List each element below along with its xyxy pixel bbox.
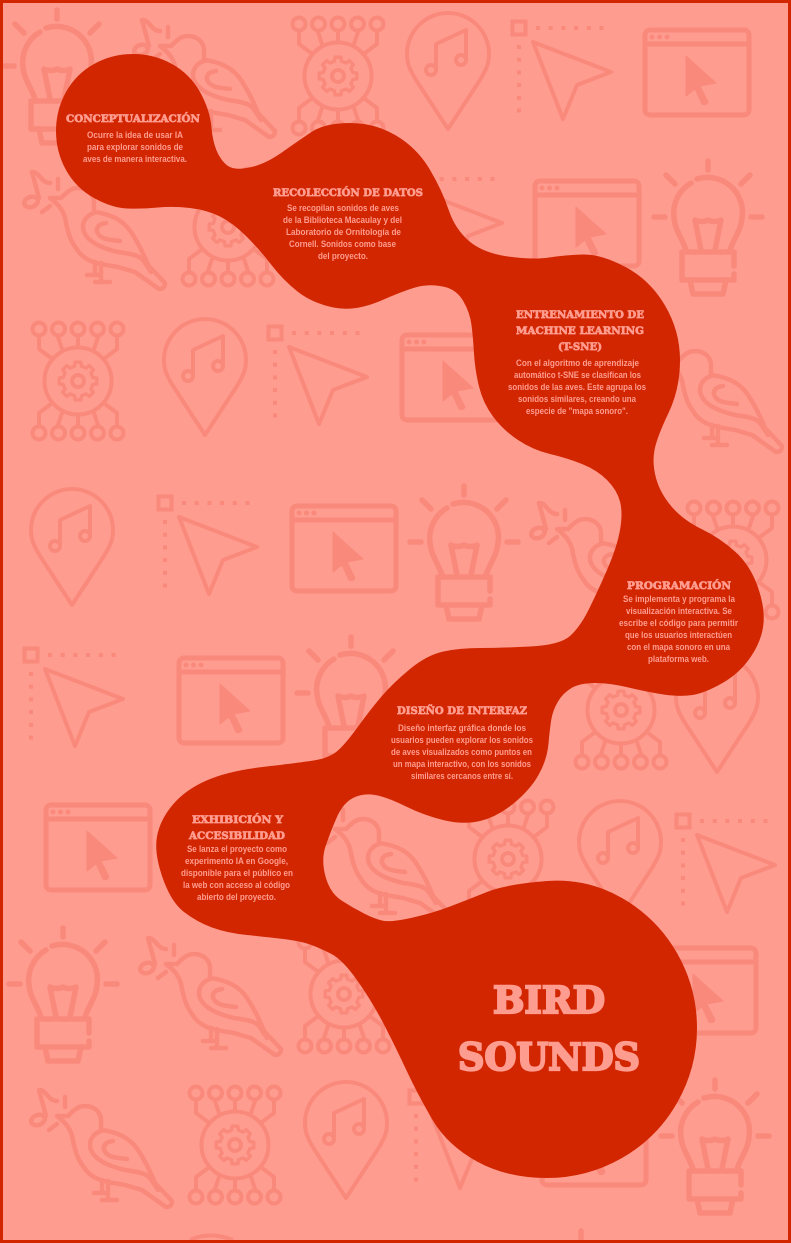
description: Se recopilan sonidos de aves — [287, 203, 399, 213]
icon: circuit gear — [688, 502, 778, 618]
step 5: diseño de interfaz — [391, 703, 533, 781]
icon: music map pin — [676, 656, 758, 772]
icon: circuit gear — [462, 800, 554, 918]
description: la web con acceso al código — [183, 880, 290, 890]
icon: light bulb — [410, 486, 518, 619]
icon: music map pin — [164, 319, 246, 435]
title: SOUNDS — [458, 1035, 640, 1079]
step 1: conceptualización — [66, 111, 200, 164]
icon: singing bird — [23, 172, 165, 289]
heading — [188, 812, 285, 842]
icon: browser window — [542, 1100, 646, 1185]
icon: singing bird — [640, 335, 782, 452]
heading: DISEÑO DE INTERFAZ — [397, 703, 527, 717]
description — [83, 130, 187, 164]
description: un mapa interactivo, con los sonidos — [393, 759, 531, 769]
heading: MACHINE LEARNING — [516, 325, 644, 337]
step 2: recolección de datos — [273, 185, 423, 261]
description: Diseño interfaz gráfica donde los — [398, 723, 526, 733]
description: de aves visualizados como puntos en — [391, 747, 532, 757]
description: sonidos similares, creando una — [518, 394, 637, 404]
heading: (T-SNE) — [558, 341, 602, 353]
heading — [516, 309, 644, 353]
heading: PROGRAMACIÓN — [627, 578, 731, 592]
icon: browser window — [46, 805, 150, 890]
icon: light bulb — [661, 1080, 769, 1213]
icon: pointer with guides — [404, 172, 502, 270]
heading: CONCEPTUALIZACIÓN — [66, 111, 200, 125]
description: automático t-SNE se clasifican los — [514, 370, 641, 380]
description: plataforma web. — [648, 654, 709, 664]
description: Se lanza el proyecto como — [187, 844, 287, 854]
icon: light bulb — [9, 928, 117, 1061]
icon: light bulb — [297, 637, 405, 770]
icon: browser window — [645, 30, 749, 115]
icon: singing bird — [133, 20, 275, 137]
icon: pointer with guides — [158, 496, 257, 594]
description: escribe el código para permitir — [619, 618, 738, 628]
icon: circuit gear — [32, 322, 124, 440]
description: Cornell. Sonidos como base — [289, 239, 396, 249]
heading: ENTRENAMIENTO DE — [516, 309, 644, 321]
icon: browser window — [292, 506, 396, 591]
description: especie de "mapa sonoro". — [526, 406, 628, 416]
description — [619, 594, 738, 664]
icon: music map pin — [31, 489, 113, 605]
icon: light bulb — [3, 10, 111, 143]
description: sonidos de las aves. Este agrupa los — [508, 382, 646, 392]
icon: pointer with guides — [410, 1090, 508, 1188]
description: usuarios pueden explorar los sonidos — [391, 735, 533, 745]
title — [458, 978, 640, 1079]
heading: RECOLECCIÓN DE DATOS — [273, 185, 423, 199]
description — [283, 203, 402, 261]
description: visualización interactiva. Se — [626, 606, 732, 616]
description: que los usuarios interactúen — [625, 630, 732, 640]
icon: circuit gear — [298, 936, 390, 1052]
description — [508, 358, 646, 416]
description — [181, 844, 293, 902]
icon: circuit gear — [190, 1086, 280, 1204]
icon: singing bird — [139, 938, 281, 1055]
description: disponible para el público en — [181, 868, 293, 878]
icon: singing bird — [30, 1090, 172, 1207]
icon: singing bird — [308, 803, 450, 920]
description — [391, 723, 533, 781]
heading: ACCESIBILIDAD — [188, 830, 285, 842]
step 4: programación — [619, 578, 738, 664]
icon: browser window — [535, 181, 639, 266]
description: abierto del proyecto. — [197, 892, 276, 902]
description: aves de manera interactiva. — [83, 154, 187, 164]
icon: browser window — [652, 948, 756, 1033]
icon: browser window — [179, 658, 283, 743]
title: BIRD — [493, 978, 605, 1022]
icon: pointer with guides — [24, 648, 123, 746]
description: Laboratorio de Ornitología de — [286, 227, 401, 237]
icon: music map pin — [579, 801, 661, 917]
description: experimento IA en Google, — [185, 856, 288, 866]
icon: browser window — [402, 335, 506, 420]
description: de la Biblioteca Macaulay y del — [283, 215, 402, 225]
description: Se implementa y programa la — [623, 594, 736, 604]
description: para explorar sonidos de — [87, 142, 183, 152]
step 6: exhibición y accesibilidad — [181, 812, 293, 902]
icon: circuit gear — [182, 168, 274, 286]
icon: circuit gear — [576, 652, 666, 768]
icon: singing bird — [530, 503, 672, 620]
step 3: entrenamiento de machine learning — [508, 309, 646, 416]
icon: music map pin — [407, 13, 489, 129]
description: similares cercanos entre sí. — [411, 771, 513, 781]
icon: circuit gear — [292, 18, 384, 134]
description: Ocurre la idea de usar IA — [87, 130, 183, 140]
description: del proyecto. — [318, 251, 368, 261]
icon: pointer with guides — [268, 326, 367, 424]
icon: pointer with guides — [676, 814, 775, 912]
description: con el mapa sonoro en una — [627, 642, 731, 652]
icon: light bulb top ray at the bottom edge — [578, 1231, 584, 1240]
icon: light bulb — [654, 161, 762, 294]
heading: EXHIBICIÓN Y — [192, 812, 284, 826]
icon: pointer with guides — [512, 22, 611, 119]
description: Con el algoritmo de aprendizaje — [516, 358, 639, 368]
icon: music map pin — [305, 1082, 387, 1198]
icon: music map pin top at the bottom edge — [190, 1236, 233, 1240]
